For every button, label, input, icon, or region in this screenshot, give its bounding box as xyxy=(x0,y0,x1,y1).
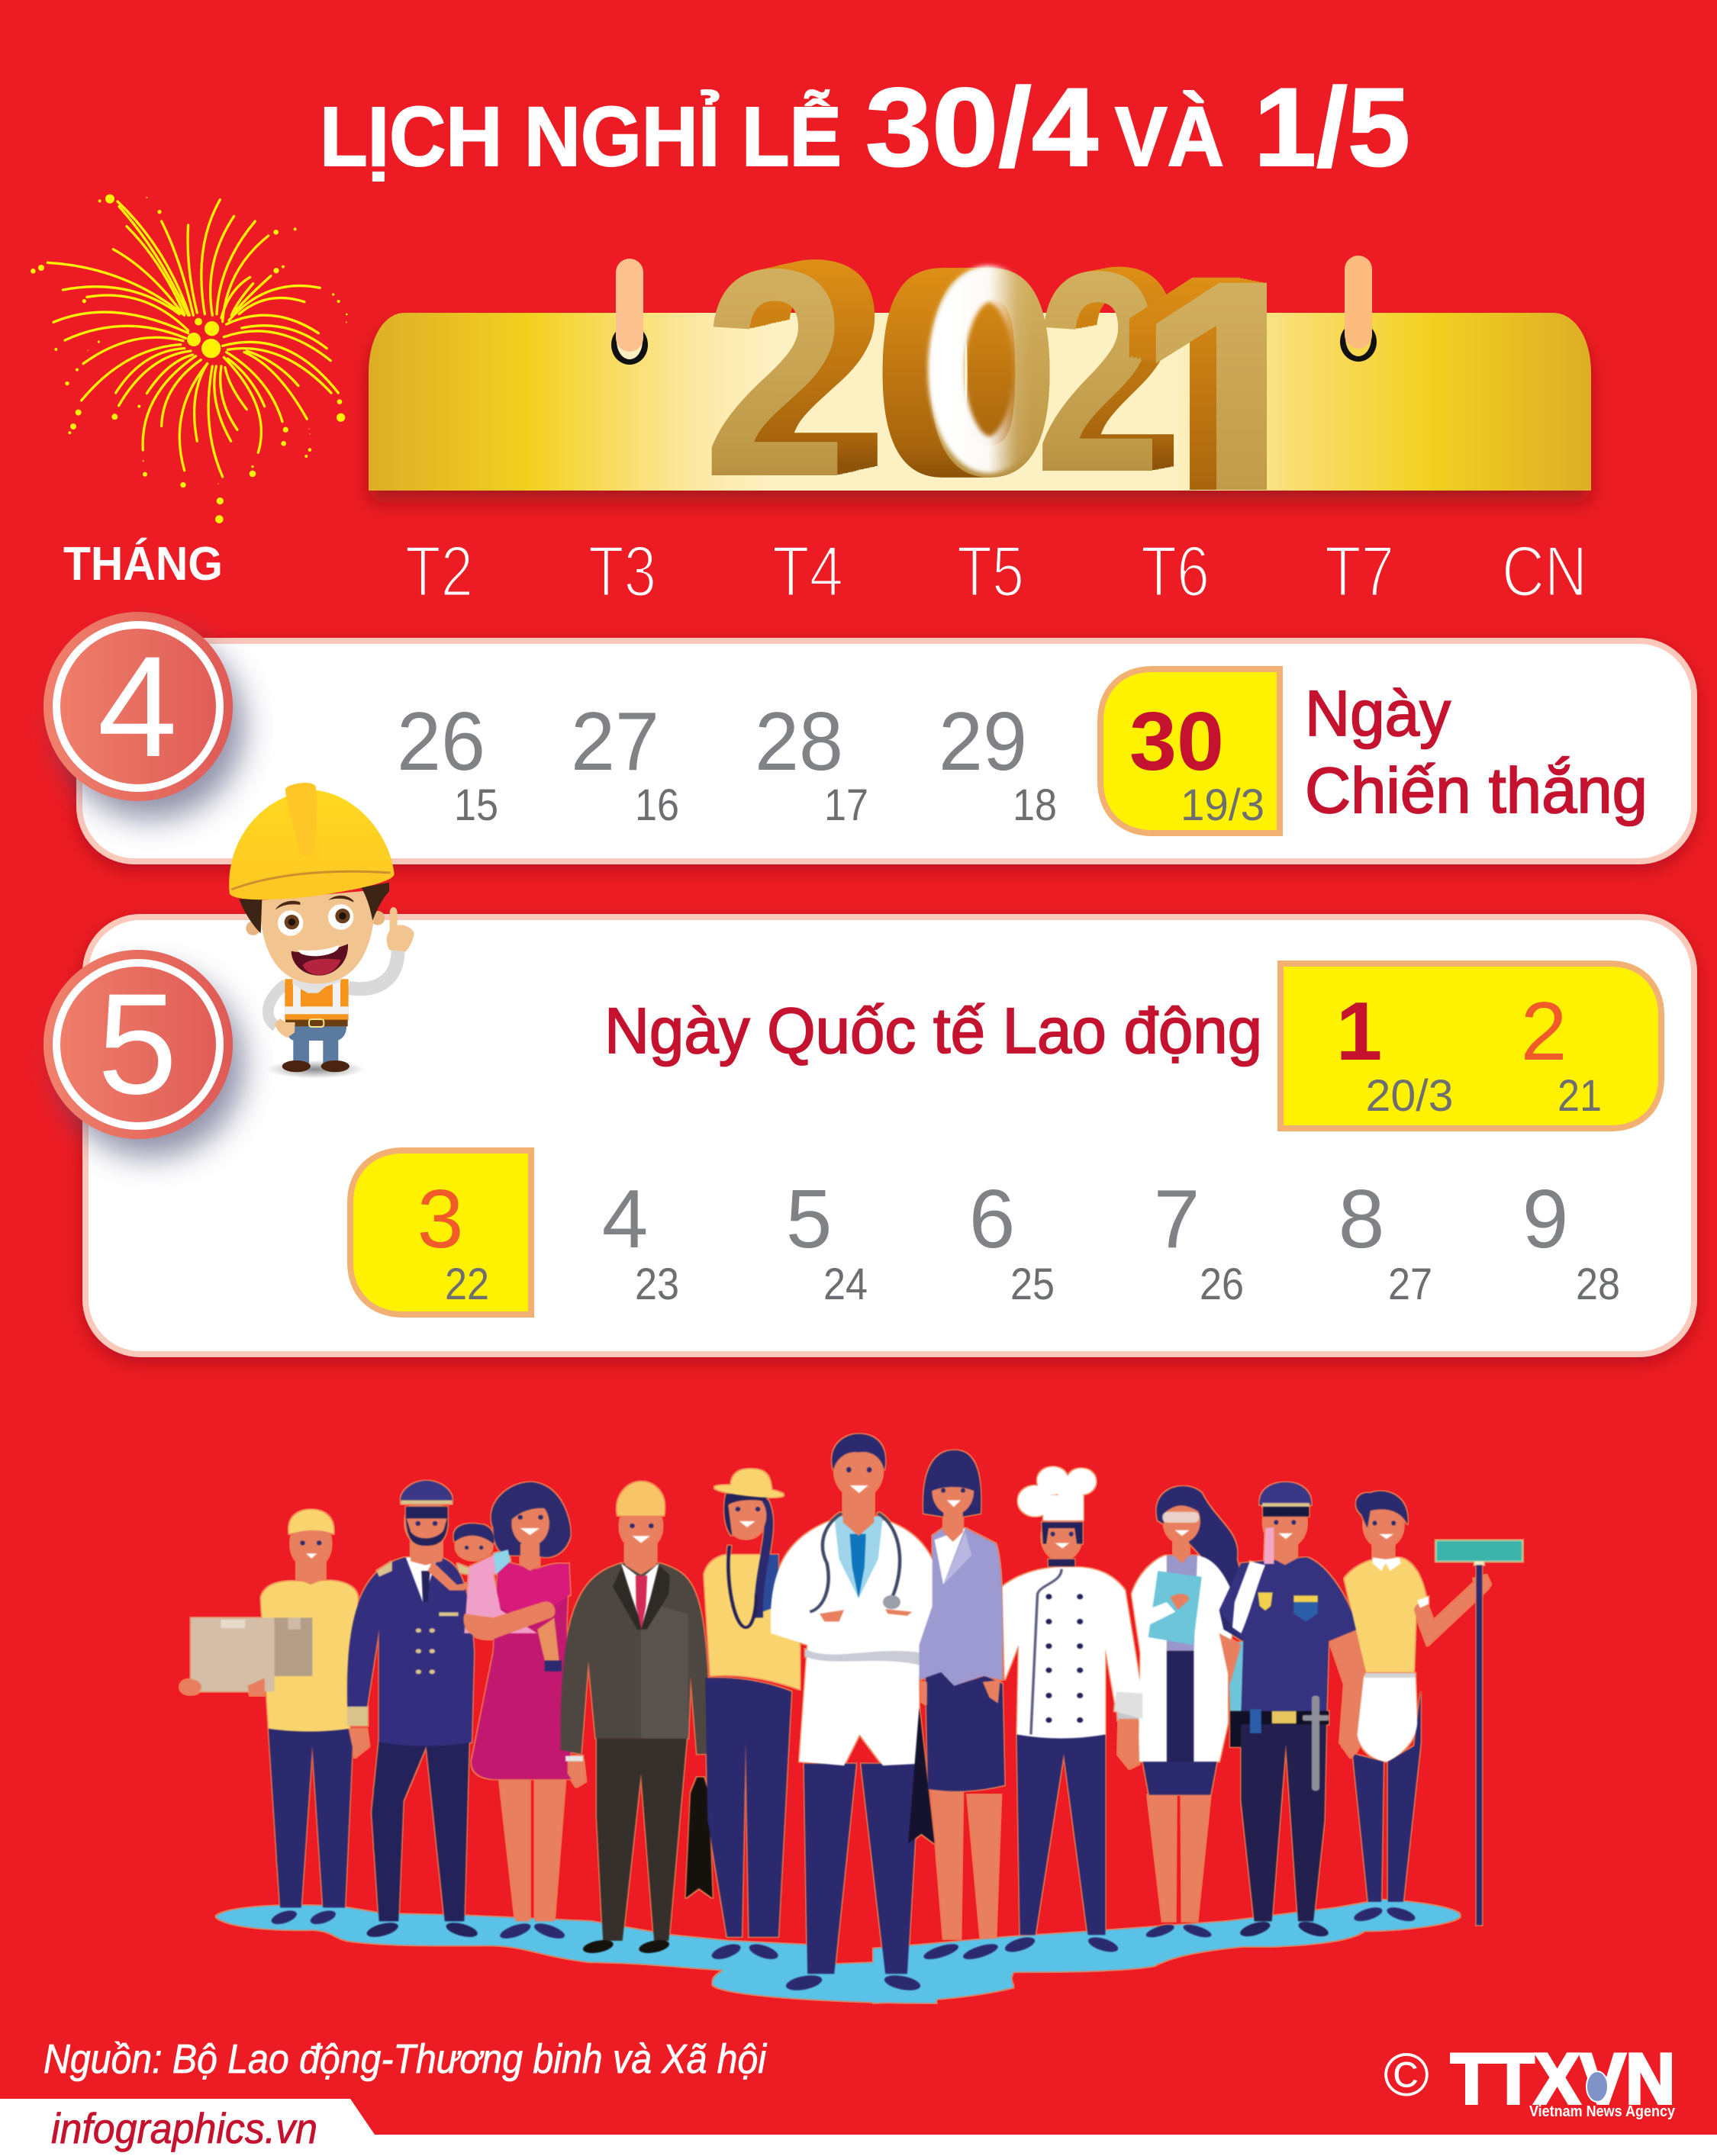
floor puddle xyxy=(216,1900,1460,2003)
May dates: 5 xyxy=(786,1173,832,1266)
figure: police officer xyxy=(1219,1482,1364,1939)
holiday name: Victory Day xyxy=(1305,677,1648,826)
left figures xyxy=(180,1434,944,1993)
weekday headers: T7 xyxy=(1325,531,1394,611)
month badge 4: 4 xyxy=(98,626,177,787)
panel: May xyxy=(85,917,1694,1354)
title: 1/5 xyxy=(1254,65,1410,189)
2021 gold digits: 2 xyxy=(703,208,848,539)
globe xyxy=(1587,2071,1608,2102)
2021 gold digits: 1 xyxy=(1131,203,1335,613)
May dates: 9 xyxy=(1522,1173,1568,1266)
April dates: 26 xyxy=(397,695,485,788)
binding ring left xyxy=(611,259,648,365)
figure: pilot xyxy=(347,1481,480,1940)
panel card xyxy=(79,641,1694,861)
April dates: 27 xyxy=(571,695,659,788)
month badge 4 xyxy=(43,612,244,819)
April dates xyxy=(397,695,1057,830)
May dates: 25 xyxy=(1010,1260,1055,1309)
weekday headers: T2 xyxy=(405,531,473,611)
shine on zero xyxy=(946,284,1032,455)
weekday headers: T4 xyxy=(772,531,843,611)
wordmark: TTXVN xyxy=(1451,2039,1675,2119)
May dates: 23 xyxy=(635,1260,679,1309)
May dates: 26 xyxy=(1200,1260,1244,1309)
May dates: 7 xyxy=(1154,1173,1200,1266)
2021 gold digits xyxy=(703,203,1335,613)
highlighted day 30 xyxy=(1100,669,1280,833)
weekday headers: T3 xyxy=(588,531,656,611)
illustration: workers group xyxy=(180,1434,1522,2003)
May dates: 4 xyxy=(602,1173,648,1266)
weekday headers xyxy=(405,531,1587,611)
weekday headers: T6 xyxy=(1141,531,1210,611)
highlighted day 3 xyxy=(350,1150,531,1315)
month column label: THÁNG xyxy=(63,538,223,590)
binding ring right xyxy=(1340,256,1377,362)
highlighted days 1 and 2: 21 xyxy=(1558,1071,1602,1121)
mascot: construction worker xyxy=(229,783,414,1079)
May dates xyxy=(602,1173,1620,1309)
copyright mark: © xyxy=(1384,2041,1429,2109)
figure: scientist xyxy=(1114,1486,1245,1940)
calendar banner with 2021 xyxy=(359,256,1601,513)
highlighted days 1 and 2: 1 xyxy=(1336,985,1382,1078)
holiday name: Victory Day: Ngày xyxy=(1305,677,1451,749)
2021 gold digits: 2 xyxy=(1035,213,1161,532)
May dates: 8 xyxy=(1338,1173,1384,1266)
month badge 5: 5 xyxy=(98,964,177,1124)
agency name: Vietnam News Agency xyxy=(1529,2103,1676,2120)
panel card xyxy=(85,917,1694,1354)
title: VÀ xyxy=(1115,90,1224,184)
title: LỊCH NGHỈ LỄ xyxy=(320,90,842,184)
panel: April xyxy=(79,641,1694,861)
figure: mother and child xyxy=(427,1482,572,1942)
April dates: 18 xyxy=(1013,780,1057,830)
footer strip with website tab xyxy=(0,2099,1717,2156)
month badge 5 xyxy=(43,950,244,1157)
figure: delivery man xyxy=(180,1510,358,1927)
April dates: 16 xyxy=(635,780,679,830)
weekday headers: T5 xyxy=(957,531,1024,611)
logo: TTXVN xyxy=(1384,2039,1676,2120)
May dates: 24 xyxy=(823,1260,868,1309)
source line: Nguồn: Bộ Lao động-Thương binh và Xã hội xyxy=(43,2036,768,2082)
highlighted days 1 and 2 xyxy=(1281,964,1661,1128)
May dates: 27 xyxy=(1388,1260,1432,1309)
banner strip xyxy=(369,313,1591,491)
April dates: 15 xyxy=(454,780,498,830)
May dates: 6 xyxy=(969,1173,1015,1266)
highlighted days 1 and 2: 20/3 xyxy=(1366,1071,1453,1121)
figure: office woman xyxy=(908,1450,1004,1962)
April dates: 29 xyxy=(939,695,1027,788)
right figures xyxy=(908,1450,1522,1962)
highlighted day 3: 3 xyxy=(417,1173,463,1266)
May dates: 28 xyxy=(1576,1260,1620,1309)
website: infographics.vn xyxy=(51,2104,317,2152)
2021 gold digits: 0 xyxy=(920,208,1060,538)
highlighted day 30: 19/3 xyxy=(1181,780,1264,830)
figure: woman with hat xyxy=(704,1469,801,1962)
highlighted day 3: 22 xyxy=(445,1260,489,1309)
highlighted day 30: 30 xyxy=(1129,695,1224,788)
holiday name: Victory Day: Chiến thắng xyxy=(1305,755,1648,826)
weekday headers: CN xyxy=(1502,531,1587,611)
highlighted days 1 and 2: 2 xyxy=(1521,985,1567,1078)
title xyxy=(320,65,1410,189)
icon: fireworks xyxy=(31,195,348,523)
April dates: 17 xyxy=(824,780,868,830)
holiday name: Labour Day: Ngày Quốc tế Lao động xyxy=(604,995,1262,1067)
figure: chef xyxy=(1003,1466,1145,1955)
figure: doctor xyxy=(771,1434,944,1993)
figure: cleaner with mop xyxy=(1342,1492,1522,1925)
title: 30/4 xyxy=(865,65,1098,189)
figure: engineer with briefcase xyxy=(561,1482,713,1955)
April dates: 28 xyxy=(755,695,843,788)
